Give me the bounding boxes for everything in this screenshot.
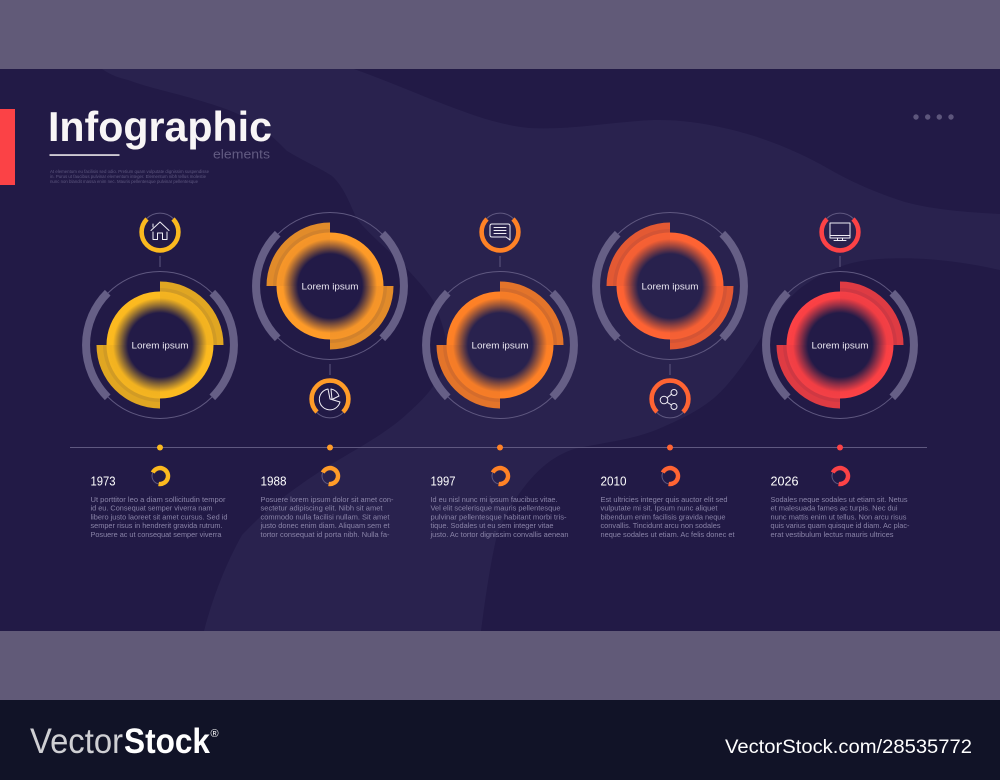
entry: 1988: Posuere lorem ipsum dolor sit amet con- <box>260 495 394 504</box>
timeline <box>70 444 927 450</box>
icon badge: home <box>142 213 178 267</box>
red accent bar <box>0 109 15 185</box>
entry: 1973: semper risus in hendrerit gravida rutrum. <box>90 521 222 530</box>
intro text: in. Purus ut faucibus pulvinar elementum integer. Elementum nibh tellus molestie <box>50 174 207 179</box>
entry: 1997: Id eu nisl nunc mi ipsum faucibus vitae. <box>430 495 558 504</box>
entry: 1973: libero justo laoreet sit amet cursus. Sed id <box>90 512 228 521</box>
entry: 1988: commodo nulla facilisi nullam. Sit amet <box>260 512 390 521</box>
entry: 2026: nunc mattis enim ut tellus. Non arcu risus <box>770 512 907 521</box>
entry: 2026: et malesuada fames ac turpis. Nec dui <box>770 504 898 513</box>
intro text <box>50 169 210 184</box>
entry: 2010: Est ultricies integer quis auctor elit sed <box>600 495 728 504</box>
chart: 1997 ring: Lorem ipsum <box>472 339 529 350</box>
entry: 2026 <box>770 468 910 539</box>
entry: 1988: sectetur adipiscing elit. Nibh sit amet <box>260 504 382 513</box>
entry: 1988 <box>259 468 394 539</box>
entry: 1988: justo donec enim diam. Aliquam sem et <box>259 521 390 530</box>
entry: 1997: pulvinar pellentesque habitant morbi tris- <box>430 512 567 521</box>
chart: 2010 ring: Lorem ipsum <box>642 280 699 291</box>
pagination dots <box>913 114 954 120</box>
icon badge: share <box>652 364 688 418</box>
icon badge: pie chart <box>312 364 348 418</box>
background wave shape <box>102 69 1000 631</box>
entry: 2026: erat vestibulum lectus mauris ultrices <box>770 530 894 539</box>
footer <box>0 700 1000 780</box>
footer id: VectorStock.com/28535772 <box>725 736 972 758</box>
entry: 1973: Posuere ac ut consequat semper viverra <box>90 530 222 539</box>
intro text: nunc non blandit massa enim nec. Mauris pellentesque pulvinar pellentesque <box>50 179 199 184</box>
entry: 1997 <box>429 468 568 539</box>
chart: 1997 ring <box>426 272 574 418</box>
entry: 1988: tortor consequat id porta nibh. Nulla fa- <box>260 530 390 539</box>
main dark panel <box>0 69 1000 631</box>
bottom band <box>0 631 1000 700</box>
intro text: At elementum eu facilisis sed odio. Pretium quam vulputate dignissim suspendisse <box>50 169 210 174</box>
entry: 1997: 1997 <box>430 474 456 488</box>
entry: 1997: tique. Sodales ut eu sem integer vitae <box>430 521 554 530</box>
title block <box>48 103 272 184</box>
footer logo: ® <box>210 728 219 740</box>
icon badge: chat <box>482 213 518 267</box>
entry: 1973: Ut porttitor leo a diam sollicitudin tempor <box>90 495 226 504</box>
chart: 2026 ring: Lorem ipsum <box>812 339 869 350</box>
entry: 1973: 1973 <box>90 474 116 488</box>
chart: 1973 ring: Lorem ipsum <box>132 339 189 350</box>
subtitle: elements <box>213 148 270 162</box>
entry: 2026: 2026 <box>770 474 799 488</box>
chart: 1973 ring <box>86 272 234 418</box>
title underline <box>50 154 120 156</box>
entry: 2026: Sodales neque sodales ut etiam sit. Netus <box>770 495 908 504</box>
entry: 2010: bibendum enim facilisis gravida neque <box>600 512 726 521</box>
top band <box>0 0 1000 69</box>
chart: 1988 ring: Lorem ipsum <box>302 280 359 291</box>
entry: 1997: Vel elit scelerisque mauris pellentesque <box>430 504 560 513</box>
chart: 2026 ring <box>766 272 914 418</box>
footer logo: Stock <box>124 722 210 761</box>
icon badge: monitor <box>822 213 858 267</box>
entry: 2010 <box>600 468 734 539</box>
entry: 2010: convallis. Tincidunt arcu non sodales <box>600 521 721 530</box>
entry: 1973 <box>90 468 228 539</box>
title: Infographic <box>48 103 272 150</box>
footer logo: Vector <box>30 722 123 761</box>
entry: 1973: id eu. Consequat semper viverra nam <box>90 504 212 513</box>
entry: 2010: neque sodales ut etiam. Ac felis donec et <box>600 530 734 539</box>
entry: 2010: vulputate mi sit. Ipsum nunc aliquet <box>600 504 718 513</box>
entry: 1997: justo. Ac tortor dignissim convallis aenean <box>429 530 568 539</box>
chart: 1988 ring <box>256 212 404 360</box>
entry: 2010: 2010 <box>600 474 627 488</box>
entry: 1988: 1988 <box>260 474 287 488</box>
chart: 2010 ring <box>596 212 744 360</box>
entry: 2026: quis varius quam quisque id diam. Ac plac- <box>770 521 910 530</box>
footer logo <box>30 722 219 761</box>
